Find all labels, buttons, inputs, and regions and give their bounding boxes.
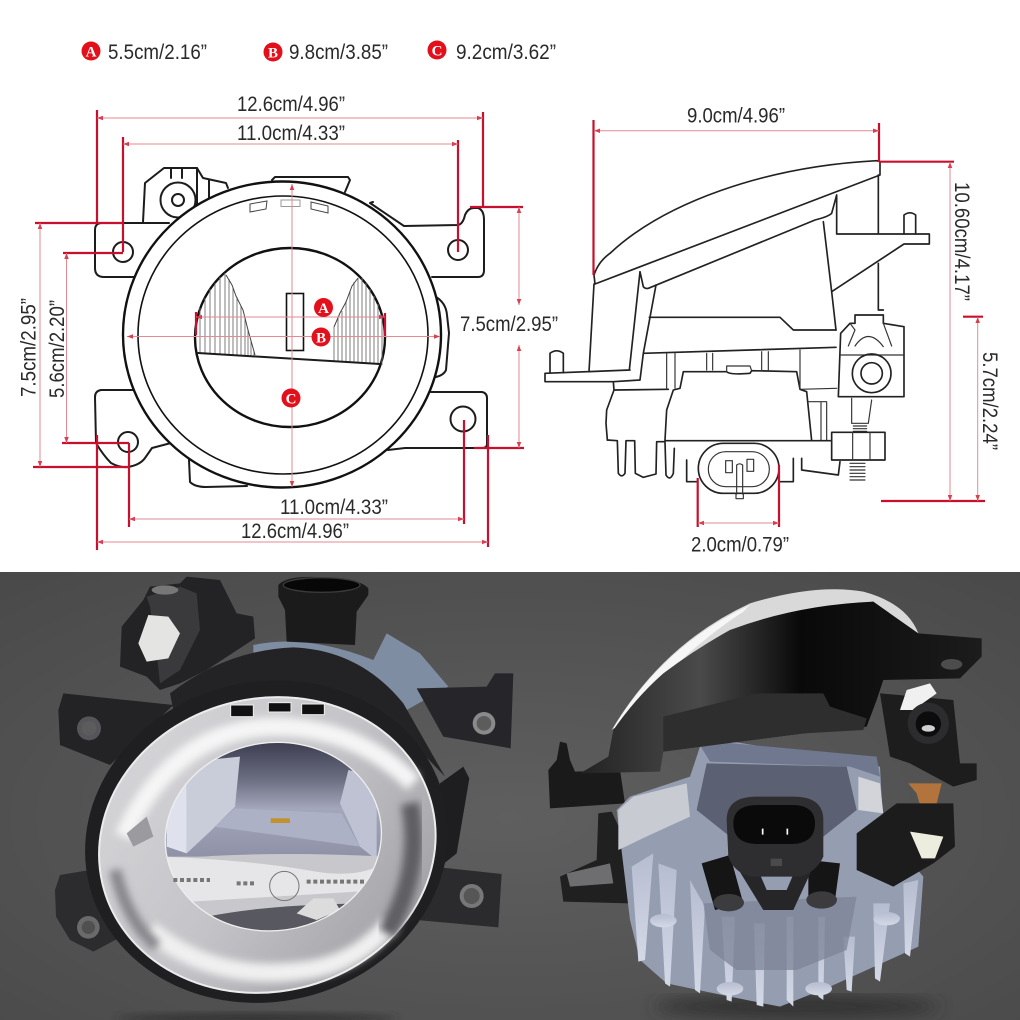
front view thick extension lines bbox=[33, 110, 524, 550]
white shell patches bbox=[618, 783, 690, 850]
front view dimension labels: 12.6cm/4.96” bbox=[237, 93, 345, 116]
side view dimension labels: 2.0cm/0.79” bbox=[691, 534, 789, 556]
side view dimension arrows bbox=[594, 131, 978, 523]
outer black bezel bbox=[53, 645, 481, 1020]
legend: A B C sizes: 5.5cm/2.16” bbox=[108, 41, 207, 64]
right lug bbox=[436, 297, 449, 377]
mid body bbox=[643, 317, 836, 441]
front view line drawing bbox=[95, 168, 487, 488]
badges on lens: B bbox=[316, 330, 326, 346]
front view dimension arrows bbox=[40, 118, 519, 542]
photo: rear of fog lamp bbox=[548, 589, 982, 1018]
side view dimension labels: 10.60cm/4.17” bbox=[950, 182, 973, 301]
side view thick extension lines bbox=[594, 120, 985, 527]
front view dimension labels: 7.5cm/2.95” bbox=[460, 313, 558, 336]
bottom tab bbox=[189, 460, 247, 487]
top windows bbox=[231, 703, 324, 717]
left reflector bbox=[187, 757, 240, 853]
right bracket bbox=[880, 683, 977, 787]
right lug bbox=[440, 767, 469, 867]
right bottom bracket bbox=[388, 392, 487, 450]
lens inner edge bbox=[153, 729, 394, 945]
lens centre interior bbox=[166, 743, 381, 930]
floor shadow bbox=[117, 1014, 397, 1020]
photo panel background bbox=[0, 572, 1020, 1020]
adjuster clip bbox=[120, 577, 255, 690]
lens profile bbox=[594, 161, 880, 284]
legend: A B C sizes: B bbox=[268, 46, 278, 62]
badges on lens bbox=[282, 298, 333, 408]
lens outer ring bbox=[123, 182, 441, 488]
lens cut line bbox=[198, 353, 380, 364]
legend: A B C sizes: 9.8cm/3.85” bbox=[289, 41, 388, 64]
rear cylinders bbox=[702, 855, 840, 911]
legend: A B C sizes: A bbox=[86, 44, 97, 60]
side view dimension labels: 9.0cm/4.96” bbox=[687, 104, 785, 128]
side view line drawing bbox=[545, 161, 929, 499]
lens center bbox=[195, 248, 385, 427]
front view dimension labels: 5.6cm/2.20” bbox=[46, 300, 69, 398]
left top bracket bbox=[95, 223, 169, 277]
lens inner ring bbox=[138, 196, 428, 474]
front view dimension labels: 11.0cm/4.33” bbox=[237, 122, 345, 145]
amber LED bbox=[271, 818, 290, 823]
reflector fins bbox=[200, 273, 382, 365]
mounting brackets bbox=[55, 673, 513, 952]
body ribs bbox=[667, 350, 837, 440]
blue-grey body bbox=[617, 737, 923, 1007]
side bracket block bbox=[838, 315, 904, 397]
blue-grey shell by clip bbox=[203, 617, 246, 670]
rear connector plug bbox=[727, 797, 823, 877]
blue-grey back shell bbox=[253, 633, 448, 710]
housing bbox=[545, 175, 929, 440]
legend: A B C sizes bbox=[82, 40, 556, 64]
badges on lens: A bbox=[318, 301, 329, 317]
right reflector bbox=[340, 770, 377, 860]
copper screw bbox=[908, 783, 942, 805]
side view dimension labels: 5.7cm/2.24” bbox=[978, 352, 1001, 450]
mounting holes bbox=[113, 240, 476, 452]
black dome housing bbox=[580, 602, 982, 773]
top left connector bbox=[143, 168, 228, 222]
embossed marks bbox=[173, 871, 367, 901]
legend: A B C sizes: 9.2cm/3.62” bbox=[456, 41, 556, 64]
smudge highlight bbox=[127, 817, 153, 847]
wire clip bbox=[857, 803, 955, 887]
black housing dome bbox=[170, 647, 445, 777]
center light bar bbox=[286, 294, 304, 350]
floor shadow bbox=[653, 995, 940, 1018]
cooling fins bbox=[632, 853, 918, 1007]
top windows bbox=[250, 200, 328, 213]
badges on lens: C bbox=[286, 392, 296, 408]
front view dimension labels bbox=[18, 93, 558, 543]
front view dimension labels: 7.5cm/2.95” bbox=[18, 298, 40, 397]
top connector bbox=[272, 177, 350, 192]
connector plug bbox=[698, 443, 779, 499]
right top bracket bbox=[370, 202, 484, 277]
left bottom bracket bbox=[95, 390, 171, 467]
bottom feet bbox=[607, 440, 840, 482]
rear connector bbox=[278, 577, 368, 645]
upper body shade bbox=[697, 740, 880, 777]
left tabs bbox=[548, 742, 628, 903]
lower body core bbox=[703, 897, 857, 970]
chrome lens ring bbox=[69, 664, 465, 1020]
ring highlights bbox=[115, 727, 414, 973]
photo: front of fog lamp bbox=[53, 577, 513, 1020]
lower lens bbox=[200, 854, 378, 910]
body texture bbox=[697, 763, 857, 837]
lens silver edge bbox=[612, 589, 918, 730]
side view dimension labels bbox=[687, 104, 1001, 556]
housing band bbox=[663, 693, 867, 752]
connector supports bbox=[737, 867, 813, 910]
legend: A B C sizes: C bbox=[432, 44, 442, 60]
screw post disc bbox=[941, 659, 962, 670]
screw and nut bbox=[832, 398, 885, 480]
front view dimension labels: 12.6cm/4.96” bbox=[241, 520, 349, 543]
front view dimension labels: 11.0cm/4.33” bbox=[280, 496, 388, 519]
mounting pins bbox=[550, 213, 916, 373]
